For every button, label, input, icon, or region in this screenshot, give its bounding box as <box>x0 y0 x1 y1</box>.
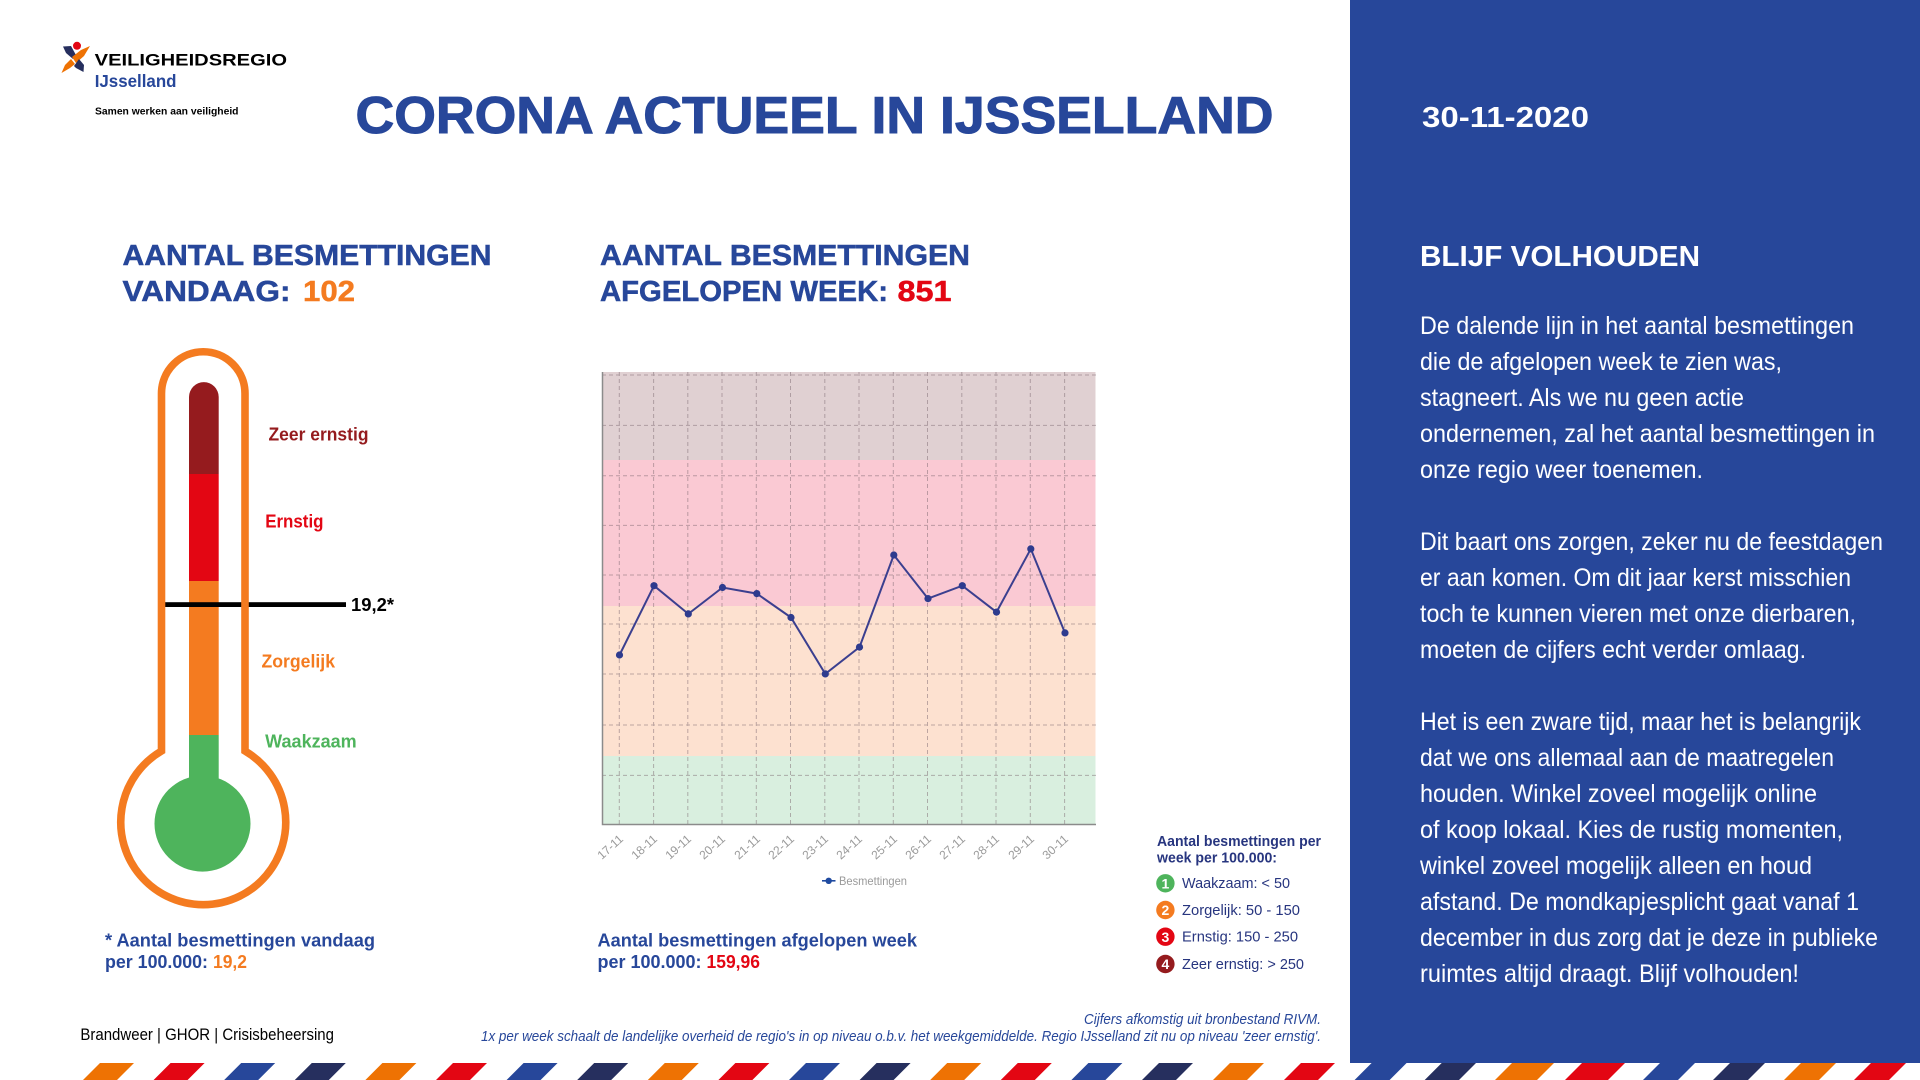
level 3: ernstig: 3 <box>1162 929 1170 945</box>
text block: sidebar body copy: dat we ons allemaal aan de maatregelen <box>1420 744 1834 772</box>
level 4: zeer ernstig: Zeer ernstig: > 250 <box>1182 956 1304 973</box>
line chart: besmettingen afgelopen twee weken <box>594 372 1096 888</box>
thermometer labels: Zorgelijk <box>262 652 336 672</box>
legend: alert levels per week per 100.000 <box>1156 834 1321 973</box>
text block: sidebar body copy: Het is een zware tijd, maar het is belangrijk <box>1420 708 1861 736</box>
text block: sidebar body copy: houden. Winkel zoveel mogelijk online <box>1420 780 1817 808</box>
footnote: besmettingen vandaag per 100.000: 19,2 <box>213 952 247 972</box>
text block: sidebar body copy <box>1419 312 1883 988</box>
level 4: zeer ernstig: 4 <box>1162 956 1170 972</box>
level 1: waakzaam: Waakzaam: < 50 <box>1182 875 1290 892</box>
x axis labels: 30-11 <box>1039 832 1071 862</box>
level 2: zorgelijk: 2 <box>1162 902 1170 918</box>
heading: aantal besmettingen vandaag: 102 <box>303 276 355 308</box>
thermometer level: zorgelijk <box>189 581 219 735</box>
thermometer labels: Waakzaam <box>265 731 357 751</box>
heading: aantal besmettingen vandaag: VANDAAG: <box>122 276 290 308</box>
footnote: besmettingen vandaag per 100.000 <box>105 930 375 972</box>
level 3: ernstig: Ernstig: 150 - 250 <box>1182 929 1298 946</box>
band: ernstig <box>602 460 1096 606</box>
text block: sidebar body copy: december in dus zorg dat je deze in publieke <box>1420 924 1878 952</box>
chart legend: Besmettingen <box>839 874 907 888</box>
x axis labels: 25-11 <box>868 832 900 862</box>
thermometer level: waakzaam with bulb <box>154 735 250 872</box>
legend: alert levels per week per 100.000: week per 100.000: <box>1156 851 1277 867</box>
footnote: besmettingen vandaag per 100.000: per 100.000: <box>105 952 208 972</box>
thermometer labels: 19,2* <box>351 595 394 615</box>
text block: sidebar body copy: of koop lokaal. Kies de rustig momenten, <box>1420 816 1843 844</box>
thermometer level: zeer ernstig <box>189 382 219 474</box>
logo: Veiligheidsregio IJsselland: VEILIGHEIDSREGIO <box>95 51 287 70</box>
text block: sidebar body copy: die de afgelopen week te zien was, <box>1420 348 1782 376</box>
footnote: besmettingen afgelopen week per 100.000: Aantal besmettingen afgelopen week <box>598 930 918 950</box>
source note: 1x per week schaalt de landelijke overheid de regio's in op niveau o.b.v. het weekgemiddelde. Regio IJsselland zit nu op niveau 'zeer ernstig'. <box>481 1029 1321 1045</box>
title: CORONA ACTUEEL IN IJSSELLAND <box>356 87 1274 145</box>
heading: aantal besmettingen afgelopen week: AFGELOPEN WEEK: <box>600 276 888 308</box>
x axis labels: 28-11 <box>970 832 1002 862</box>
x axis labels: 24-11 <box>833 832 865 862</box>
footer: organisations: Brandweer | GHOR | Crisisbeheersing <box>80 1026 334 1044</box>
thermometer chart <box>121 352 394 905</box>
source note: Cijfers afkomstig uit bronbestand RIVM. <box>1084 1012 1321 1028</box>
heading: date: 30-11-2020 <box>1422 102 1589 134</box>
footnote: besmettingen afgelopen week per 100.000 <box>598 930 918 972</box>
heading: aantal besmettingen afgelopen week <box>600 240 970 308</box>
x axis labels: 27-11 <box>936 832 968 862</box>
x axis labels: 29-11 <box>1005 832 1037 862</box>
level 2: zorgelijk: Zorgelijk: 50 - 150 <box>1182 902 1300 919</box>
text block: sidebar body copy: afstand. De mondkapjesplicht gaat vanaf 1 <box>1420 888 1859 916</box>
logo: Veiligheidsregio IJsselland: IJsselland <box>95 71 176 91</box>
heading: aantal besmettingen vandaag <box>122 240 492 308</box>
text block: sidebar body copy: De dalende lijn in het aantal besmettingen <box>1420 312 1854 340</box>
thermometer outline <box>121 352 286 905</box>
thermometer labels <box>262 425 394 751</box>
thermometer level: ernstig <box>189 474 219 581</box>
panel: right blue sidebar <box>1350 0 1920 1063</box>
x axis labels: 23-11 <box>799 832 831 862</box>
x axis labels: 26-11 <box>902 832 934 862</box>
text block: sidebar body copy: stagneert. Als we nu geen actie <box>1420 384 1744 412</box>
logo: Veiligheidsregio IJsselland: Samen werken aan veiligheid <box>95 106 238 117</box>
logo: Veiligheidsregio IJsselland <box>62 42 287 117</box>
heading: aantal besmettingen afgelopen week: 851 <box>898 276 952 308</box>
thermometer labels: Ernstig <box>265 512 324 532</box>
data points <box>616 545 1069 678</box>
source note <box>481 1012 1321 1045</box>
x axis labels: 22-11 <box>765 832 797 862</box>
heading: aantal besmettingen afgelopen week: AANTAL BESMETTINGEN <box>600 240 970 272</box>
text block: sidebar body copy: onze regio weer toenemen. <box>1420 456 1703 484</box>
marker line at 19,2 <box>165 602 346 607</box>
x axis labels <box>594 832 1071 862</box>
text block: sidebar body copy: winkel zoveel mogelijk alleen en houd <box>1419 852 1812 880</box>
x axis labels: 19-11 <box>662 832 694 862</box>
heading: blijf volhouden: BLIJF VOLHOUDEN <box>1420 241 1700 273</box>
heading: aantal besmettingen vandaag: AANTAL BESMETTINGEN <box>122 240 492 272</box>
band: zeer ernstig <box>602 372 1096 460</box>
legend: alert levels per week per 100.000: Aantal besmettingen per <box>1157 834 1321 850</box>
footnote: besmettingen vandaag per 100.000: * Aantal besmettingen vandaag <box>105 930 375 950</box>
icon: logo figure <box>62 42 90 73</box>
level 1: waakzaam: 1 <box>1162 876 1170 892</box>
x axis labels: 17-11 <box>594 832 626 862</box>
text block: sidebar body copy: ondernemen, zal het aantal besmettingen in <box>1420 420 1875 448</box>
footnote: besmettingen afgelopen week per 100.000: per 100.000: <box>598 952 702 972</box>
thermometer labels: Zeer ernstig <box>268 425 368 445</box>
text block: sidebar body copy: moeten de cijfers echt verder omlaag. <box>1420 636 1806 664</box>
text block: sidebar body copy: er aan komen. Om dit jaar kerst misschien <box>1420 564 1851 592</box>
footnote: besmettingen afgelopen week per 100.000: 159,96 <box>706 952 760 972</box>
text block: sidebar body copy: toch te kunnen vieren met onze dierbaren, <box>1420 600 1856 628</box>
x axis labels: 18-11 <box>628 832 660 862</box>
x axis labels: 20-11 <box>696 832 728 862</box>
text block: sidebar body copy: ruimtes altijd draagt. Blijf volhouden! <box>1420 960 1799 988</box>
band: zorgelijk <box>602 606 1096 756</box>
data line <box>620 549 1065 674</box>
band: waakzaam <box>602 756 1096 824</box>
x axis labels: 21-11 <box>731 832 763 862</box>
decorative airmail stripes along the bottom <box>83 1063 1906 1080</box>
text block: sidebar body copy: Dit baart ons zorgen, zeker nu de feestdagen <box>1420 528 1883 556</box>
